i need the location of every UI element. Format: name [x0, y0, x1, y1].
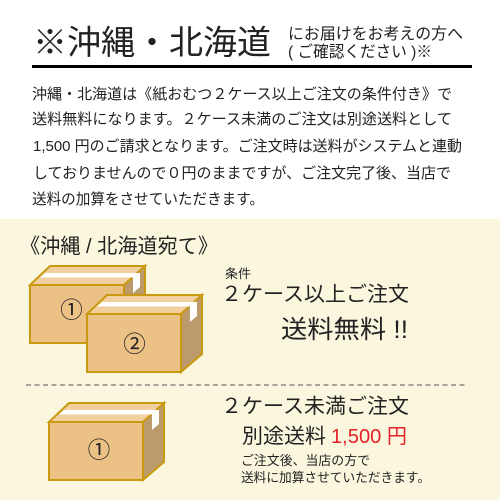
under two cases block: ２ケース未満ご注文: [221, 395, 409, 418]
body text block: 送料の加算をさせていただきます。: [32, 190, 264, 208]
condition block: ２ケース以上ご注文: [221, 283, 409, 306]
icon: box 1 of 2: ①: [60, 298, 83, 323]
icon: box 2 of 2: ②: [123, 332, 146, 357]
icon: box 2 of 2: [87, 295, 202, 372]
under two cases block: 送料に加算させていただきます。: [241, 470, 430, 485]
condition block: 送料無料 !!: [281, 316, 408, 344]
subtitle: ( ご確認ください )※: [288, 43, 432, 61]
under two cases block: [221, 395, 430, 485]
body text block: しておりませんので０円のままですが、ご注文完了後、当店で: [33, 165, 451, 182]
section heading: 《沖縄 / 北海道宛て》: [20, 235, 218, 258]
dashed divider: [26, 384, 467, 386]
under two cases block: ご注文後、当店の方で: [241, 453, 370, 468]
body text block: [32, 86, 462, 208]
title: ※沖縄・北海道: [33, 25, 271, 62]
body text block: 送料無料になります。２ケース未満のご注文は別途送料として: [32, 111, 452, 128]
subtitle: [288, 25, 463, 61]
icon: single box: ①: [88, 438, 110, 463]
cream background panel: [0, 219, 500, 500]
heading rule: [32, 65, 472, 68]
body text block: 沖縄・北海道は《紙おむつ２ケース以上ご注文の条件付き》で: [32, 86, 452, 103]
icon: single box: [49, 403, 164, 480]
icon: box 1 of 2: [30, 266, 145, 343]
under two cases block: 1,500 円: [331, 425, 407, 448]
condition block: 条件: [225, 267, 251, 281]
condition block: [221, 267, 409, 344]
under two cases block: 別途送料: [242, 425, 326, 448]
subtitle: にお届けをお考えの方へ: [288, 25, 463, 43]
body text block: 1,500 円のご請求となります。ご注文時は送料がシステムと連動: [33, 138, 462, 155]
